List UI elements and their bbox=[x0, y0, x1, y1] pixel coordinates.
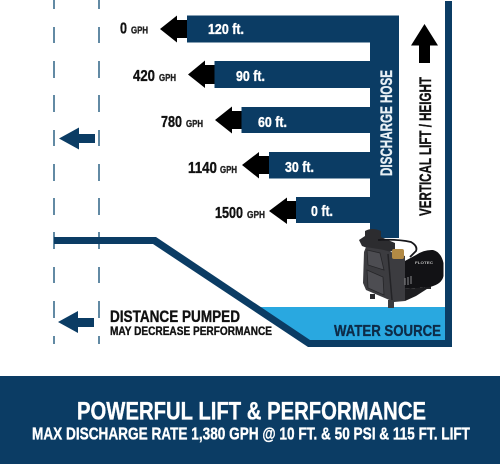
row: 30 ft: 30 ft. bbox=[285, 159, 314, 176]
vertical lift label: VERTICAL LIFT / HEIGHT bbox=[417, 77, 435, 216]
row: 90 ft: 90 ft. bbox=[236, 68, 265, 85]
arrow: flow direction lower bbox=[58, 311, 94, 333]
arrow: vertical lift bbox=[411, 24, 438, 63]
row: 90 ft: 420 bbox=[133, 68, 155, 85]
row: 0 ft bbox=[215, 198, 333, 224]
row: 120 ft: GPH bbox=[131, 26, 148, 36]
row: 0 ft: 0 ft. bbox=[311, 203, 333, 220]
row: 120 ft: 0 bbox=[120, 20, 127, 38]
discharge hose bbox=[187, 16, 399, 238]
footer title: POWERFUL LIFT & PERFORMANCE bbox=[77, 398, 426, 426]
hose label: DISCHARGE HOSE bbox=[378, 70, 396, 176]
row: 30 ft bbox=[188, 152, 314, 178]
row: 0 ft: 1500 bbox=[215, 205, 243, 222]
row: 60 ft: 60 ft. bbox=[258, 114, 287, 131]
row: 30 ft: GPH bbox=[220, 165, 237, 176]
distance pumped note bbox=[110, 308, 272, 338]
icon: water pump: FLOTEC bbox=[415, 261, 434, 265]
row: 60 ft bbox=[161, 106, 287, 134]
footer banner bbox=[0, 376, 500, 464]
row: 60 ft: GPH bbox=[186, 119, 203, 130]
row: 120 ft: 120 ft. bbox=[208, 21, 244, 38]
water source pool bbox=[258, 307, 445, 341]
row: 90 ft bbox=[133, 60, 265, 88]
ground and wall outline bbox=[54, 1, 452, 347]
water source label: WATER SOURCE bbox=[334, 323, 441, 340]
distance pumped note: DISTANCE PUMPED bbox=[110, 308, 240, 326]
distance pumped note: MAY DECREASE PERFORMANCE bbox=[110, 324, 272, 338]
row: 120 ft bbox=[120, 16, 244, 42]
icon: water pump bbox=[359, 229, 444, 308]
row: 0 ft: GPH bbox=[247, 210, 265, 221]
row: 30 ft: 1140 bbox=[188, 160, 217, 177]
row: 90 ft: GPH bbox=[159, 73, 176, 84]
row: 60 ft: 780 bbox=[161, 114, 182, 131]
arrow: flow direction upper bbox=[59, 128, 95, 150]
